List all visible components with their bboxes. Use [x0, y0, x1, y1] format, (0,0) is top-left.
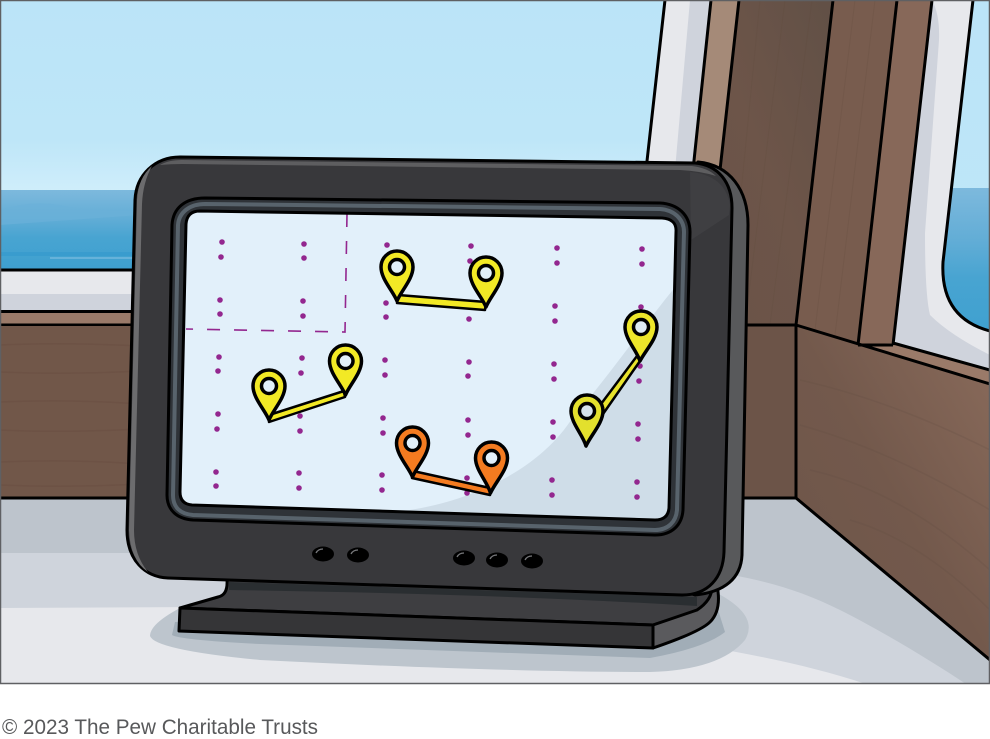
- dashed closure boundary: [186, 214, 347, 332]
- table top: [0, 498, 990, 684]
- pin: yellow 3: [330, 345, 362, 395]
- route line: top: [397, 295, 486, 310]
- pin: yellow 6: [571, 395, 603, 446]
- pin: yellow 5: [625, 311, 657, 361]
- screen bezel: [167, 198, 690, 535]
- top rim highlight: [160, 160, 716, 176]
- fishing grid dots: [213, 239, 645, 500]
- chart screen: [180, 211, 676, 520]
- route line: left: [269, 391, 345, 422]
- stand front edge: [179, 608, 653, 648]
- window frame: left post: [646, 0, 739, 170]
- sea through left window: [0, 190, 140, 270]
- front face: [127, 157, 732, 595]
- monitor shadow on table: [150, 592, 749, 672]
- left wood wall: [0, 326, 140, 498]
- monitor housing: [127, 157, 748, 595]
- upper right sheen: [690, 172, 730, 240]
- window frame: right post: [893, 0, 990, 370]
- pin: yellow 4: [253, 370, 285, 420]
- route line: orange: [412, 471, 490, 495]
- left rim highlight: [129, 166, 152, 572]
- pin: yellow 2: [470, 257, 502, 307]
- wood pillars: [700, 0, 932, 345]
- stand top and neck: [180, 580, 718, 625]
- pin: orange 2: [476, 442, 508, 493]
- lower wood panel: [740, 325, 796, 498]
- screen outline: [180, 211, 676, 520]
- rear shell: [680, 162, 748, 595]
- pin: orange 1: [396, 427, 428, 477]
- copyright credit: © 2023 The Pew Charitable Trusts: [2, 716, 318, 739]
- right window view: [930, 0, 990, 340]
- left window sill: [0, 270, 140, 326]
- monitor buttons: [312, 546, 543, 568]
- pin: yellow 1: [381, 251, 413, 301]
- route line: right: [601, 356, 640, 414]
- sky: [0, 0, 990, 200]
- stand side: [653, 585, 718, 648]
- monitor stand: [179, 580, 718, 648]
- screen glare shade: [403, 286, 676, 520]
- right wood wall: [796, 325, 990, 660]
